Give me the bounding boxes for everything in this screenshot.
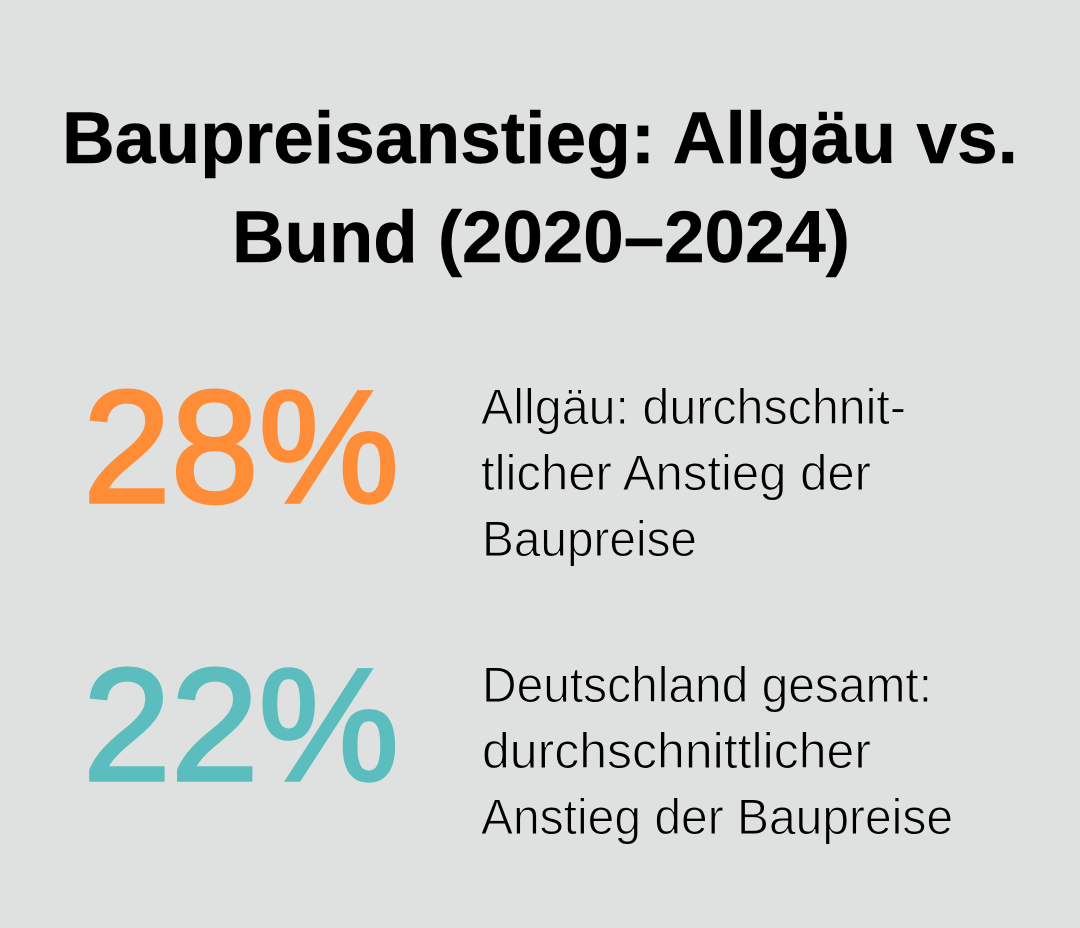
description: Allgäu: Allgäu: durchschnit- bbox=[481, 379, 906, 435]
description: Deutschland bbox=[481, 657, 953, 845]
description: Allgäu bbox=[481, 379, 906, 567]
title: Bund (2020–2024) bbox=[232, 197, 850, 278]
title bbox=[62, 98, 1018, 278]
title: Baupreisanstieg: Allgäu vs. bbox=[62, 98, 1018, 179]
description: Deutschland: Anstieg der Baupreise bbox=[481, 789, 953, 845]
description: Allgäu: Baupreise bbox=[482, 511, 697, 567]
description: Deutschland: Deutschland gesamt: bbox=[482, 657, 932, 713]
stat: 22 percent: 22% bbox=[83, 635, 399, 814]
description: Deutschland: durchschnittlicher bbox=[482, 723, 871, 779]
description: Allgäu: tlicher Anstieg der bbox=[481, 445, 871, 501]
stat: 28 percent: 28% bbox=[83, 357, 399, 536]
